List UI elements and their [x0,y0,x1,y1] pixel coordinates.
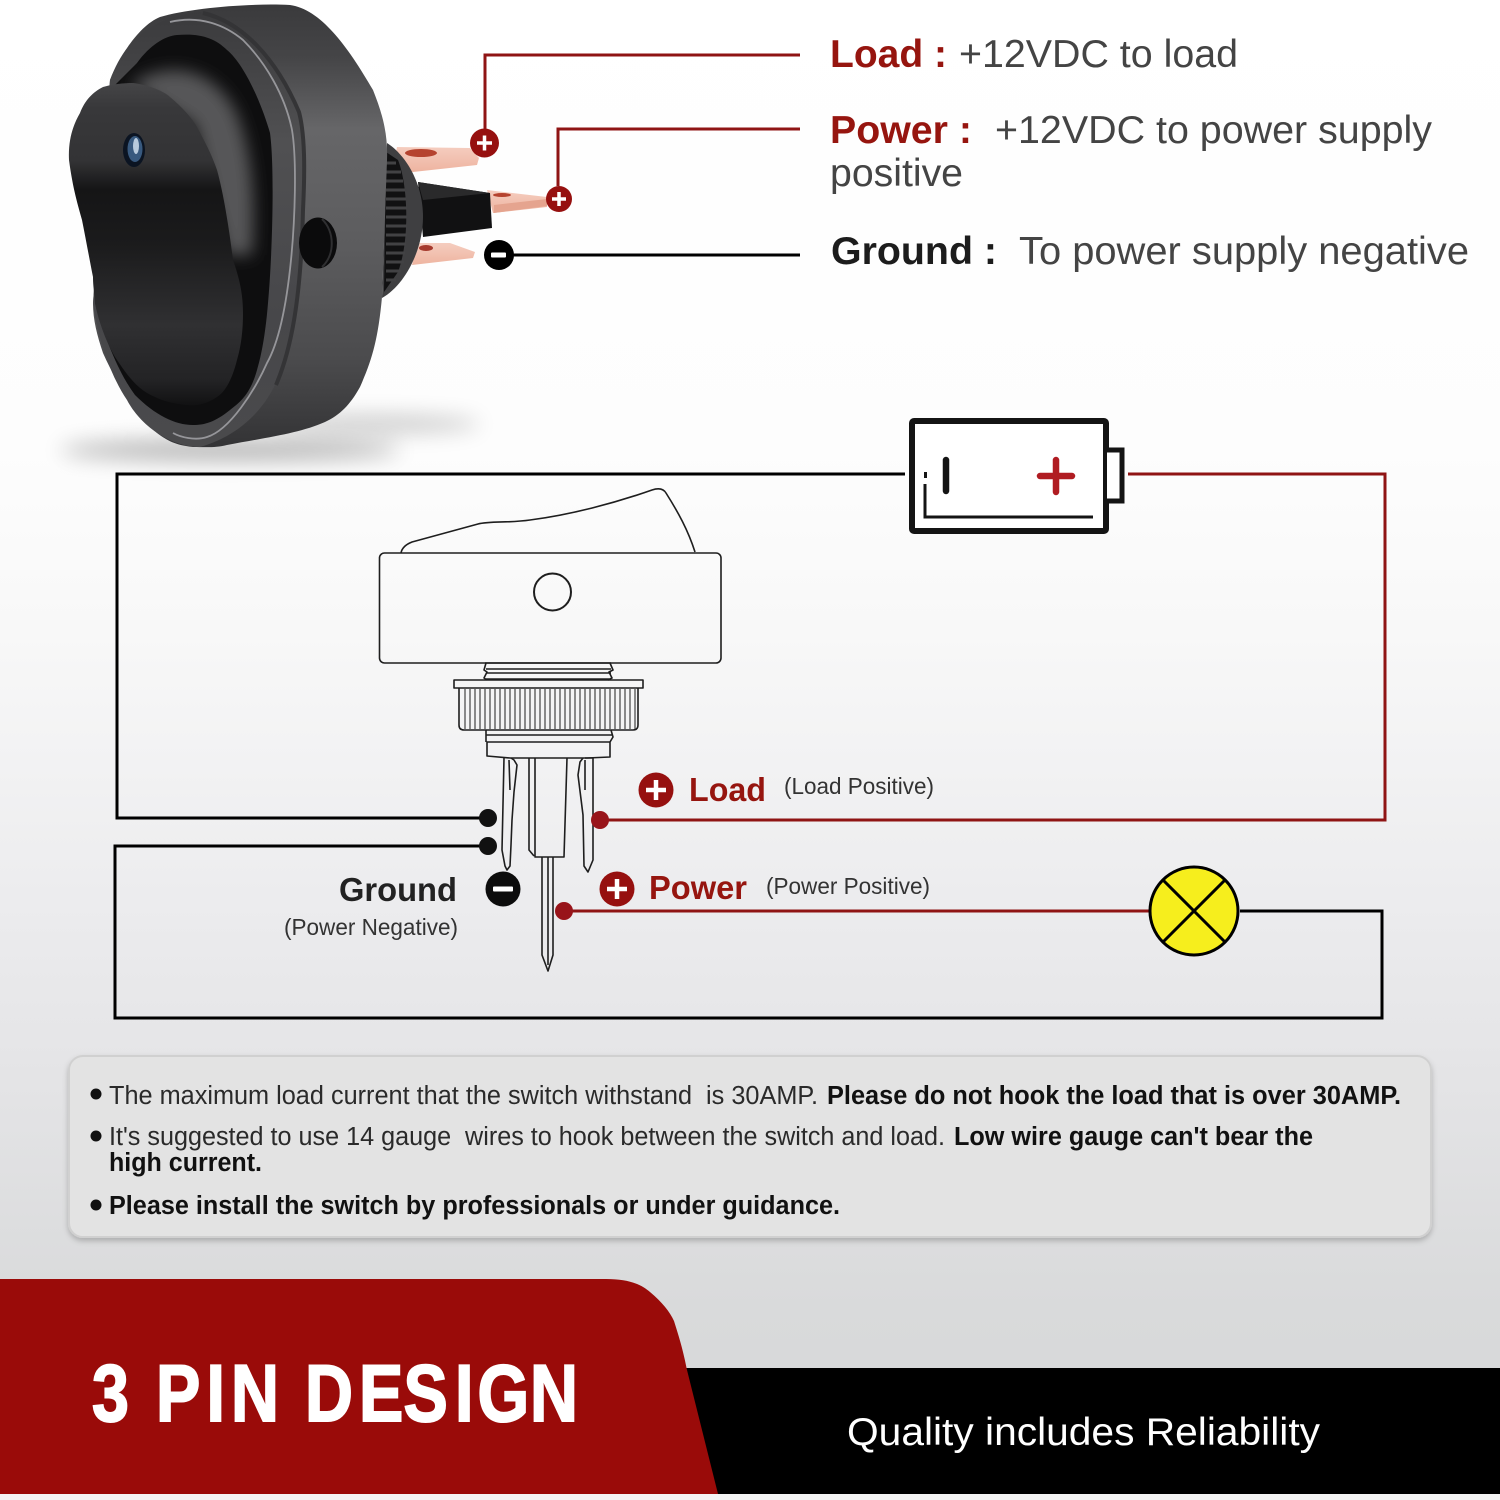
footer: tagline: Quality includes Reliability [847,1411,1321,1454]
text: power description: +12VDC to power supply [995,109,1432,152]
icon: load plus marker [470,128,499,158]
product photo: rocker switch [60,5,547,461]
label: power: (Power Positive) [766,873,930,899]
footer: red tab [0,1279,718,1494]
LED indicator [123,133,145,167]
text: power description: Power : [830,109,972,152]
terminal: middle power pin [418,182,547,237]
left pin [502,758,517,870]
label: power: Power [649,869,747,906]
panel: usage notes [69,1056,1431,1237]
note 2: high current. [109,1149,262,1177]
title: 3 PIN DESIGN [92,1348,578,1438]
label: power [600,869,930,906]
switch outline drawing [380,489,721,971]
thread [484,663,613,680]
long centre pin [542,857,553,971]
right pin [578,758,593,872]
wiring diagram [115,421,1385,1018]
front bezel [93,12,304,447]
icon: power plus marker [546,186,572,212]
rocker outline [401,489,695,553]
middle pin housing [529,758,567,857]
bottom edge strip [0,1494,1500,1500]
terminal: lower ground pin [412,243,475,265]
mounting hole [299,218,337,268]
text: load description: +12VDC to load [959,33,1238,76]
callout line: load [485,55,800,130]
recess [95,35,273,425]
label: ground: (Power Negative) [284,914,458,940]
wire: power pin to lamp [564,910,1150,912]
callout line: power [558,129,800,186]
icon: battery [912,421,1122,531]
note 2 [90,1123,1313,1177]
wire: battery positive to load pin [600,474,1385,820]
rocker button [69,83,243,405]
wire: battery negative to switch [117,474,905,818]
note 3: Please install the switch by professionals or under guidance. [109,1192,840,1220]
knurled nut [382,143,423,298]
lamp [1150,867,1238,955]
note 2: It's suggested to use 14 gauge wires to hook between the switch and load. [109,1123,945,1151]
node: power [555,902,573,920]
node: load [591,811,609,829]
note 1 [90,1082,1401,1110]
footer: black band [686,1368,1500,1494]
text: ground description: To power supply negative [1019,230,1469,273]
node: ground lower [479,837,497,855]
base collar [486,730,613,758]
terminal: upper load pin [392,147,479,172]
label: load: Load [689,771,766,808]
note 2: Low wire gauge can't bear the [954,1123,1313,1151]
note 1: Please do not hook the load that is over 30AMP. [827,1082,1401,1110]
label: load [638,771,934,808]
label: ground [284,871,520,940]
text: ground description: Ground : [831,230,997,273]
icon: ground minus marker [484,240,514,270]
wire: ground return [115,846,1382,1018]
switch housing [93,5,387,447]
knurled collar [459,688,638,730]
housing outline [380,553,721,663]
callout line: ground [512,254,800,256]
text: load description: Load : [830,33,947,76]
flange [454,680,643,688]
note 1: The maximum load current that the switch withstand is 30AMP. [109,1082,818,1110]
node: ground upper [479,809,497,827]
text: power description: positive [830,152,963,195]
label: load: (Load Positive) [784,773,934,799]
label: ground: Ground [339,871,457,908]
